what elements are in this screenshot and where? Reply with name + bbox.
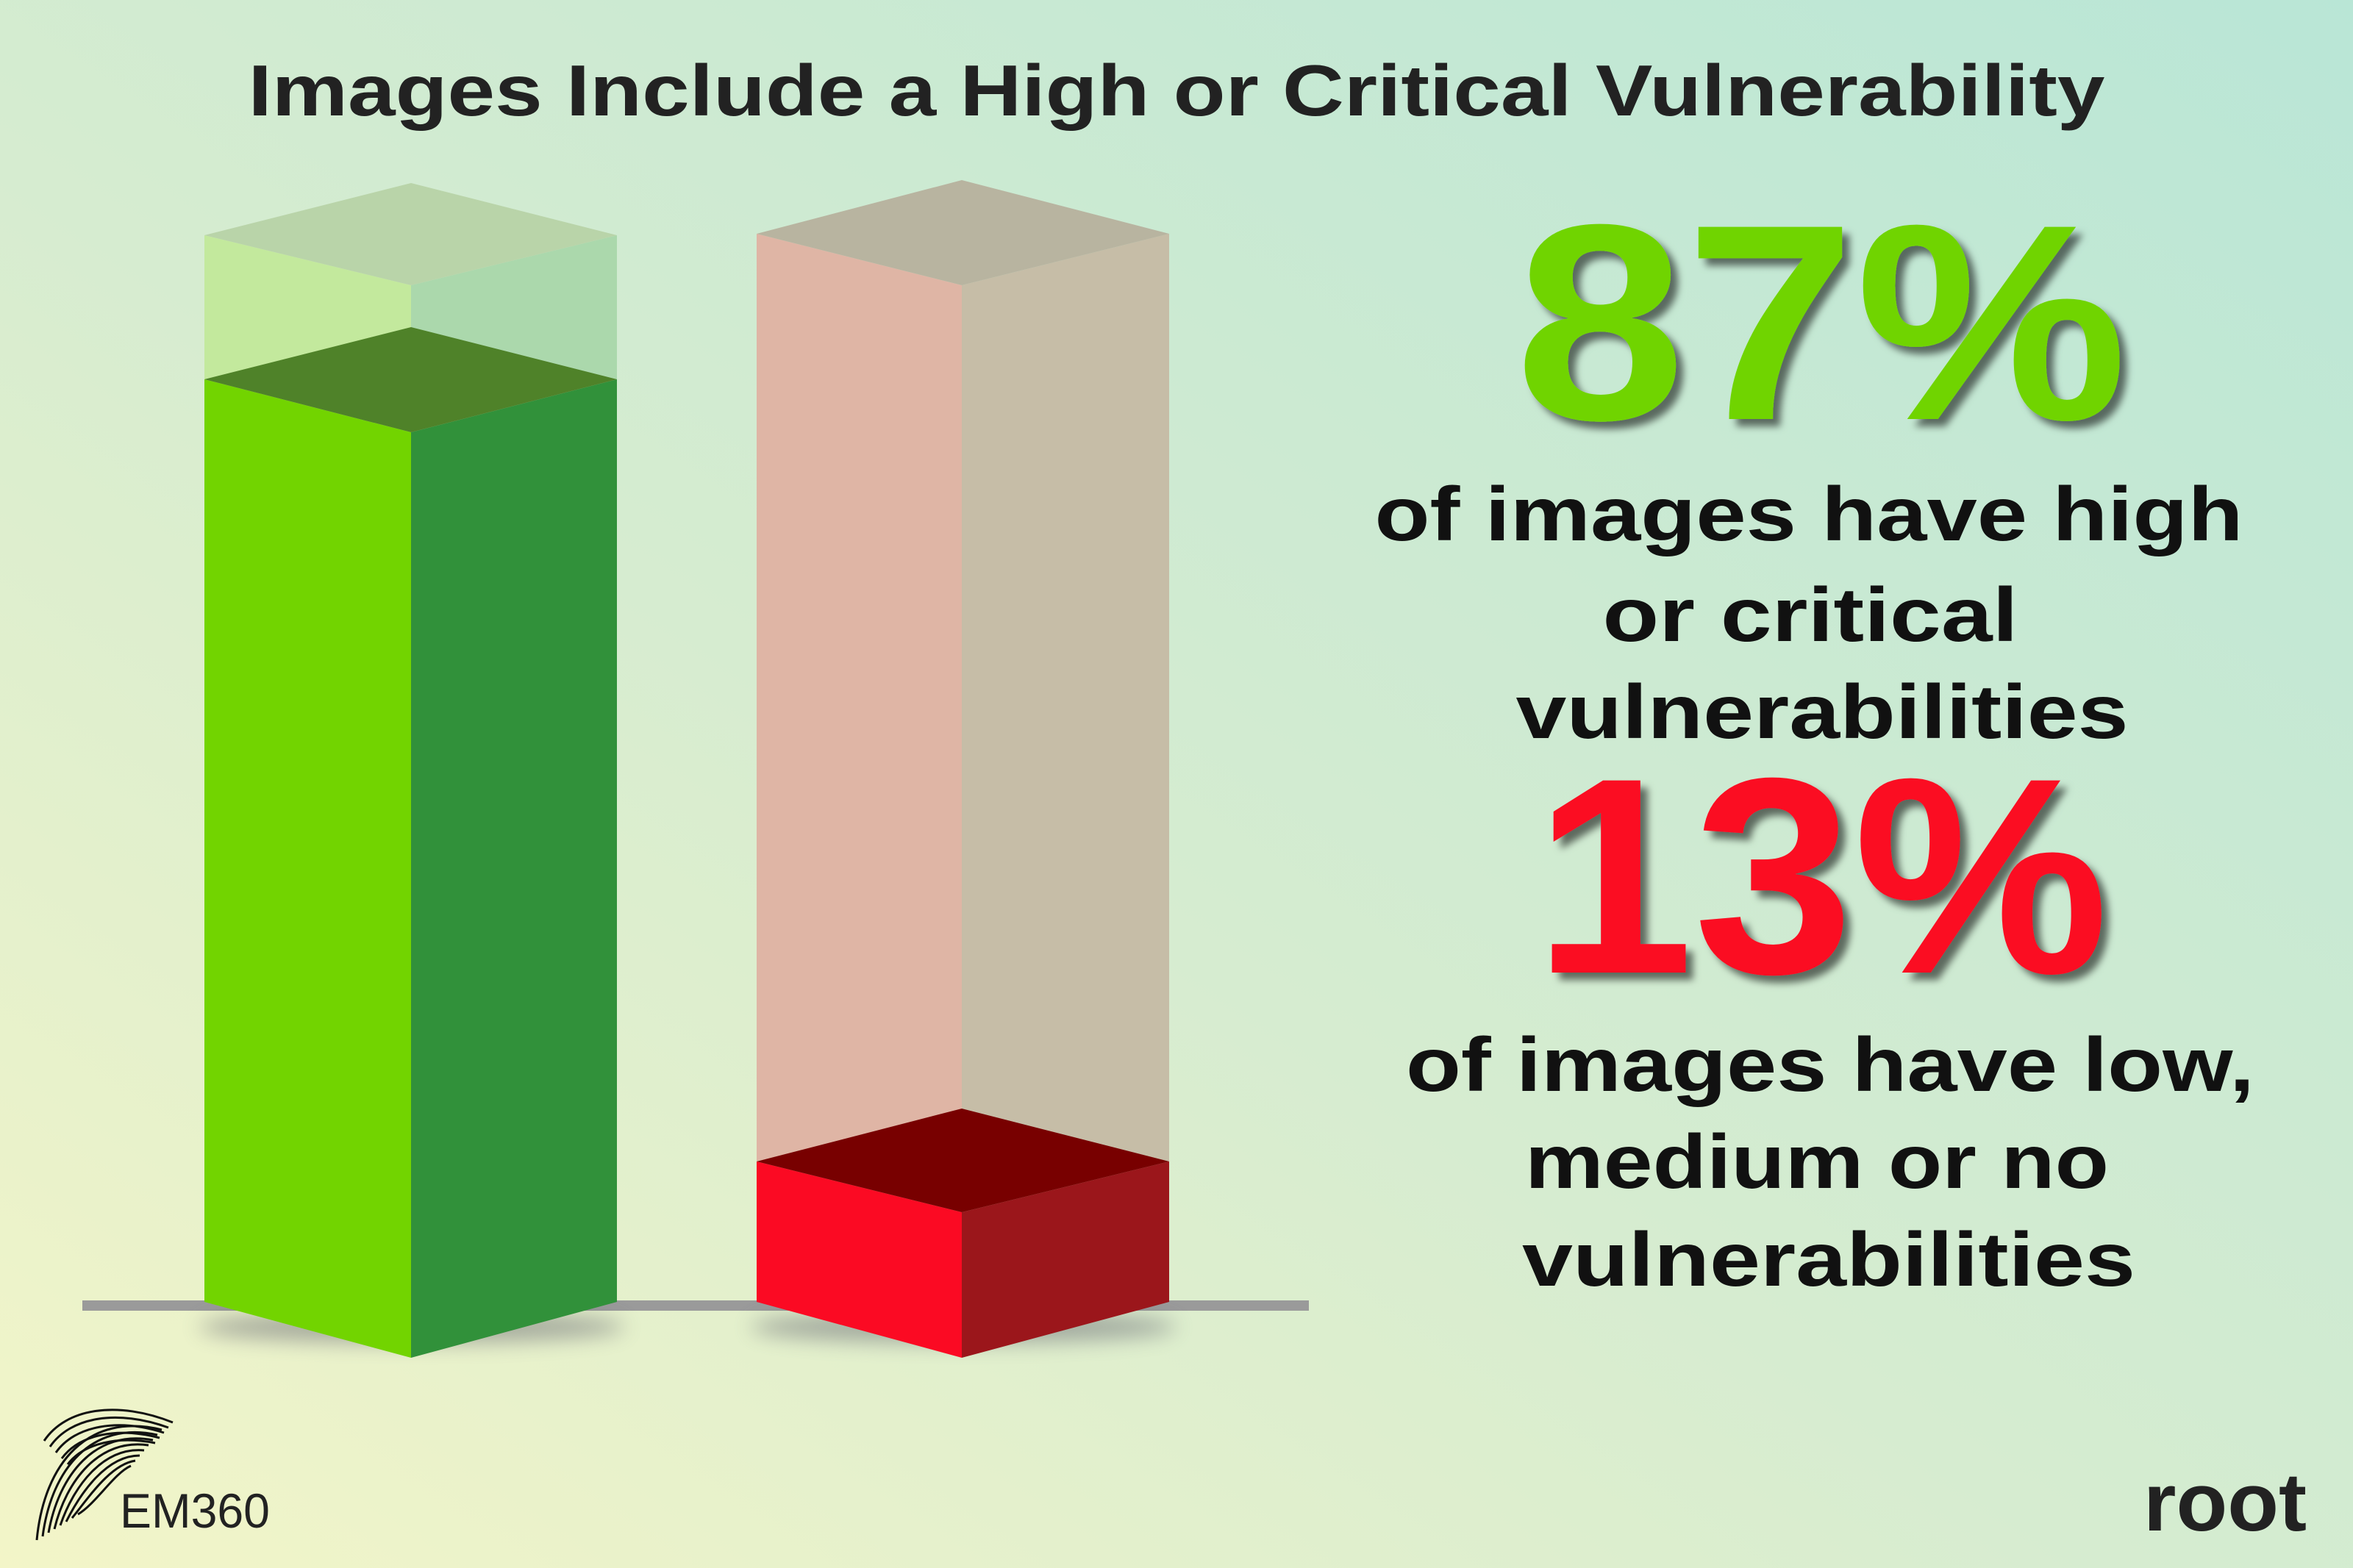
stat: 87%: 87% — [1515, 166, 2128, 479]
text block: high or critical: of images have high — [1375, 472, 2243, 557]
text block: low medium none: of images have low, — [1406, 1023, 2254, 1108]
logo: EM360 — [37, 1410, 270, 1540]
stat: 13%: 13% — [1534, 720, 2109, 1032]
baseline axis — [82, 1300, 1309, 1343]
bar: 13% red — [757, 180, 1169, 1358]
text block: high or critical — [1375, 472, 2243, 755]
logo: EM360: EM360 — [120, 1483, 270, 1538]
text block: low medium none — [1406, 1023, 2254, 1303]
text block: low medium none: medium or no — [1525, 1120, 2109, 1205]
text block: high or critical: vulnerabilities — [1516, 670, 2128, 755]
text block: low medium none: vulnerabilities — [1522, 1217, 2135, 1303]
logo: root: root — [2143, 1456, 2307, 1548]
title: Images Include a High or Critical Vulnerability — [249, 50, 2104, 131]
bar: 87% green — [204, 183, 617, 1358]
text block: high or critical: or critical — [1603, 573, 2018, 658]
